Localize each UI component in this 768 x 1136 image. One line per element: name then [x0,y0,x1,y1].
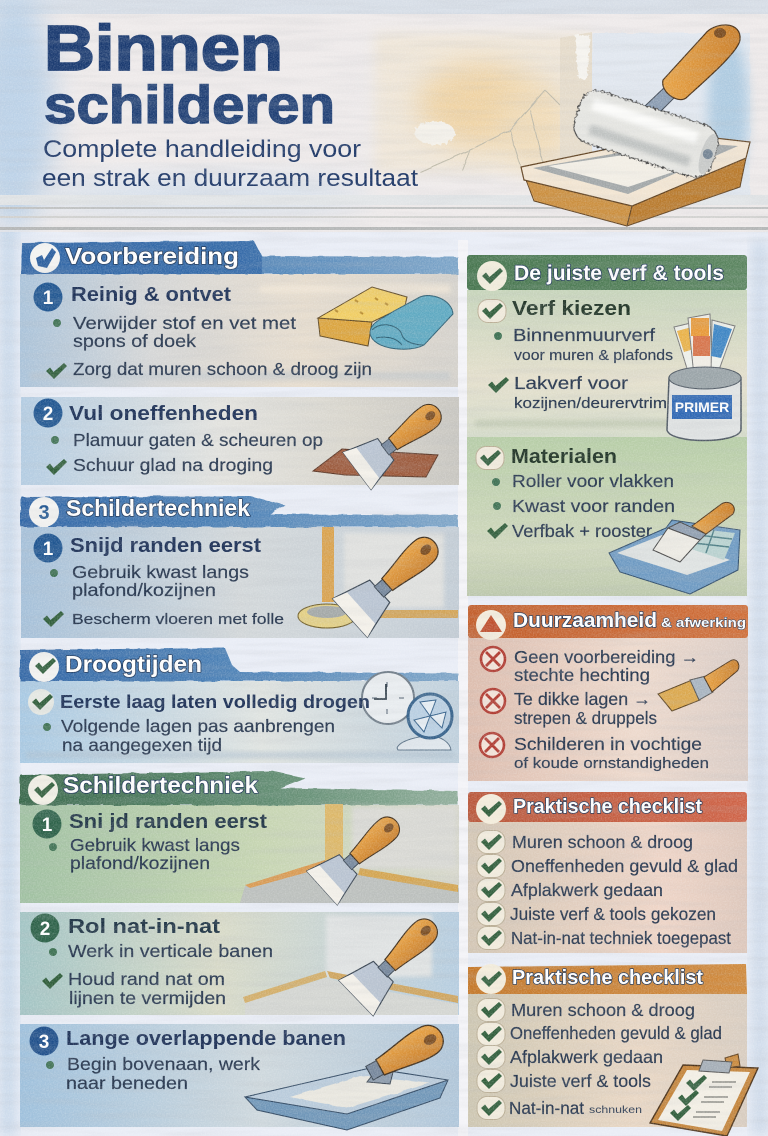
panel: Praktische checklist 1 [468,792,747,953]
heading: De juiste verf & tools: De juiste verf & tools [514,262,724,285]
heading: Duurzaamheid & afwerking: Duurzaamheid [513,610,657,632]
list: common mistakes: stechte hechting [514,665,650,685]
heading: Schildertechniek [20,771,458,805]
icon: clock and fan [362,672,452,750]
step 1: Snijd randen eerst: Gebruik kwast langs [72,562,249,582]
icon: paint tray with brush [609,502,740,594]
checklist items: Juiste verf & tools gekozen [510,904,716,924]
heading: Duurzaamheid & afwerking [468,605,748,640]
step 1: Snijd randen eerst: Bescherm vloeren met folle [72,611,284,628]
header banner [0,0,768,232]
icon: putty knife on sandpaper [313,391,453,490]
panel: Droogtijden [20,648,459,763]
step 2: Rol nat-in-nat [30,914,273,1008]
section: Verf kiezen: Lakverf voor [514,373,628,393]
panel: Schildertechniek (blue) [21,495,459,638]
panel background [468,637,748,781]
section: Materialen: Materialen [511,446,617,468]
list: common mistakes [480,647,709,772]
panel: Rol nat-in-nat [20,905,459,1016]
step 2: Rol nat-in-nat: lijnen te vermijden [69,988,226,1008]
step 1: Reinig & ontvet: 1 [43,288,54,309]
section: Materialen: Verfbak + rooster [512,521,652,541]
checklist items: Oneffenheden gevuld & glad [510,1023,722,1043]
checklist items: Afplakwerk gedaan [511,880,663,900]
panel: Voorbereiding [20,241,458,387]
list: common mistakes: strepen & druppels [514,708,657,728]
checklist items: Muren schoon & droog [511,1000,695,1020]
step 1: Reinig & ontvet: Zorg dat muren schoon & droog zijn [73,359,372,379]
text: drying times: Volgende lagen pas aanbrengen [61,716,335,736]
icon: primer can with colour swatches [667,314,741,440]
step 2: Vul oneffenheden: 2 [43,404,53,425]
step 1: Snijd randen eerst: plafond/kozijnen [72,580,216,600]
subtitle: Complete handleiding voor [43,136,361,163]
section: Materialen: Roller voor vlakken [512,471,674,491]
panel background [467,290,747,596]
step 1: Snijd randen eerst: plafond/kozijnen [70,853,210,873]
heading: De juiste verf & tools [467,255,747,291]
step 2: Rol nat-in-nat: Werk in verticale banen [68,941,273,961]
step 2: Vul oneffenheden: Schuur glad na droging [73,455,273,475]
step 3: Lange overlappende banen: Lange overlappende banen [66,1028,346,1050]
heading: Schildertechniek: 3 [38,502,50,524]
list: common mistakes: Schilderen in vochtige [514,734,702,754]
step 2: Vul oneffenheden: Plamuur gaten & scheuren op [73,430,323,450]
section: Verf kiezen [478,298,673,412]
section: Verf kiezen: Verf kiezen [512,298,631,320]
list: common mistakes: Geen voorbereiding → [514,647,699,667]
heading: Schildertechniek [21,495,458,527]
heading: Droogtijden [20,648,458,682]
heading: Praktische checklist [468,792,747,824]
step 1: Snijd randen eerst: Snijd randen eerst [70,535,261,557]
step 3: Lange overlappende banen: 3 [39,1032,49,1053]
step 2: Rol nat-in-nat: Houd rand nat om [68,969,225,989]
panel: Vul oneffenheden [21,391,459,490]
panel background [468,821,747,953]
checklist items: Nat-in-nat techniek toegepast [511,928,731,948]
section: Verf kiezen: Binnenmuurverf [513,325,655,345]
checklist items: Muren schoon & droog [512,832,693,852]
panel background [21,397,459,485]
icon: paint brush [658,660,739,711]
title: Binnen [44,12,283,84]
icon: primer can with colour swatches: PRIMER [675,399,729,415]
panel background [20,912,459,1015]
heading: Voorbereiding: Voorbereiding [65,243,239,269]
step 1: Snijd randen eerst: 1 [42,815,53,836]
step 1: Reinig & ontvet [34,282,372,379]
subtitle [42,136,418,192]
step 1: Snijd randen eerst: Gebruik kwast langs [70,835,240,855]
heading: Praktische checklist: Praktische checklist [513,796,702,818]
panel background [20,1024,459,1127]
step 1: Snijd randen eerst [34,534,284,628]
text: drying times: na aangegexen tijd [62,735,222,755]
panel background [468,993,747,1127]
text: drying times [28,689,370,755]
icon: clipboard [650,1054,758,1136]
section: Materialen [476,446,675,541]
step 2: Vul oneffenheden: Vul oneffenheden [69,403,258,425]
step 1: Reinig & ontvet: Verwijder stof en vet met [73,313,296,333]
checklist items: Oneffenheden gevuld & glad [511,856,738,876]
panel background [21,527,459,638]
heading: Schildertechniek: Schildertechniek [63,772,258,798]
heading: Schildertechniek: Schildertechniek [66,495,250,521]
icon: scraper in corner [243,905,458,1016]
panel: Praktische checklist 2 [468,964,758,1136]
heading: Voorbereiding [21,241,458,274]
icon: scraper, tape and window frame [298,523,458,637]
icon: scraper at skirting [245,804,458,905]
checklist items: Juiste verf & tools [510,1071,651,1091]
panel: Lange overlappende banen [20,1020,459,1130]
heading: Praktische checklist [468,964,747,994]
checklist items [477,830,738,950]
checklist items [477,998,722,1120]
list: common mistakes: Te dikke lagen → [514,689,651,709]
icon: tray with scraper [245,1020,449,1130]
panel background [20,274,458,387]
step 3: Lange overlappende banen [30,1026,346,1093]
step 2: Rol nat-in-nat: 2 [40,919,50,940]
icon: sponge and cloth [318,287,453,349]
heading: Praktische checklist: Praktische checklist [512,967,703,989]
step 2: Vul oneffenheden [34,398,323,475]
checklist items: schnuken [589,1105,642,1116]
panel: De juiste verf & tools [467,255,747,596]
section: Verf kiezen: kozijnen/deurervtrim [514,395,667,412]
title: schilderen [44,76,335,135]
icon: paint roller in tray [521,25,750,226]
step 1: Snijd randen eerst: Sni jd randen eerst [69,811,267,833]
panel background [20,681,459,763]
banner wall painting [0,0,768,232]
heading: Droogtijden: Droogtijden [65,651,202,677]
step 1: Snijd randen eerst: 1 [43,539,54,560]
step 2: Rol nat-in-nat: Rol nat-in-nat [68,916,220,938]
panel background [20,805,459,903]
subtitle: een strak en duurzaam resultaat [42,165,418,192]
panel: Duurzaamheid & afwerking [468,605,748,781]
panel: Schildertechniek (green) [20,771,459,905]
step 1: Snijd randen eerst [32,810,267,873]
step 1: Reinig & ontvet: spons of doek [73,331,196,351]
text: drying times: Eerste laag laten volledig drogen [60,691,370,712]
checklist items: Afplakwerk gedaan [510,1047,663,1067]
list: common mistakes: of koude ornstandigheden [514,755,709,772]
title [44,12,335,135]
step 3: Lange overlappende banen: Begin bovenaan, werk [67,1054,260,1074]
section: Materialen: Kwast voor randen [512,496,675,516]
heading: Duurzaamheid & afwerking: & afwerking [661,615,746,630]
step 3: Lange overlappende banen: naar beneden [66,1073,188,1093]
section: Verf kiezen: voor muren & plafonds [514,347,673,364]
step 1: Reinig & ontvet: Reinig & ontvet [71,284,231,306]
checklist items: Nat-in-nat [509,1098,584,1118]
